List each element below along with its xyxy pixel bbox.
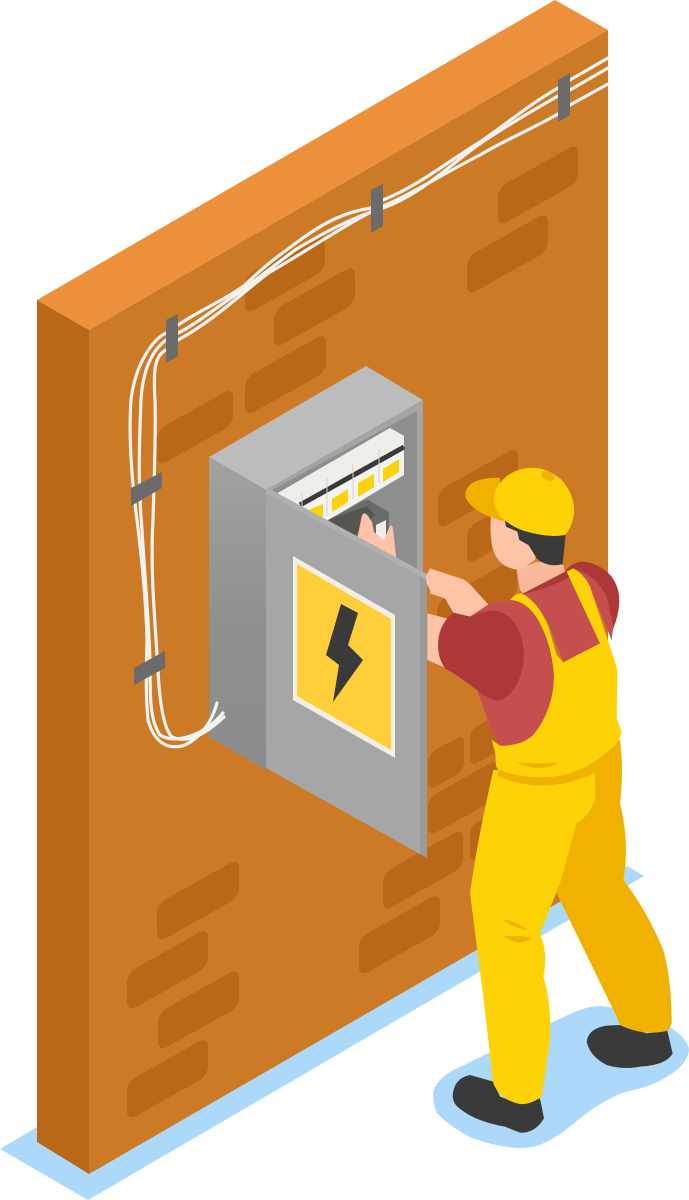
shirt back xyxy=(523,572,600,662)
bricks xyxy=(127,143,578,1121)
breaker row xyxy=(278,428,404,534)
warning sign xyxy=(293,556,395,758)
bib fold xyxy=(517,762,559,768)
wire clips xyxy=(131,73,570,685)
sleeve xyxy=(438,611,524,701)
breaker switches xyxy=(309,459,399,526)
fuse switch being held xyxy=(328,499,389,543)
waist band shadow xyxy=(497,740,620,786)
door xyxy=(266,487,427,858)
electrician xyxy=(426,468,673,1133)
wall side face xyxy=(37,300,89,1174)
fingers on switch xyxy=(356,513,397,565)
wall top face xyxy=(37,0,608,330)
wall front face xyxy=(89,30,608,1174)
head xyxy=(490,517,540,570)
back shoe xyxy=(587,1025,673,1068)
collar shadow xyxy=(523,571,570,594)
electrical wires xyxy=(130,58,608,747)
neck xyxy=(517,562,565,593)
shirt side xyxy=(470,600,555,747)
near forearm and hand xyxy=(426,568,494,617)
floor strip xyxy=(0,866,644,1200)
box frame xyxy=(266,400,423,600)
torso, arms and head xyxy=(426,468,622,786)
box top face xyxy=(209,366,423,490)
shirt stripe xyxy=(577,569,613,640)
cap crown xyxy=(494,468,574,536)
back leg xyxy=(557,740,672,1033)
box side face xyxy=(209,457,266,770)
fuse box xyxy=(209,366,427,858)
door edge xyxy=(420,574,427,858)
far arm xyxy=(427,613,447,668)
hair xyxy=(505,521,566,565)
overall bib and straps xyxy=(492,568,622,783)
far shoulder xyxy=(563,562,619,630)
legs and shoes xyxy=(453,740,673,1133)
dotted breaker tops xyxy=(278,428,404,505)
lightning bolt xyxy=(326,604,363,702)
cap button xyxy=(540,469,556,483)
cap visor xyxy=(465,478,505,522)
floor shadow under feet xyxy=(433,1006,689,1148)
knee folds xyxy=(502,919,528,930)
front leg xyxy=(470,770,595,1104)
box interior xyxy=(272,411,417,600)
front shoe xyxy=(453,1075,544,1133)
